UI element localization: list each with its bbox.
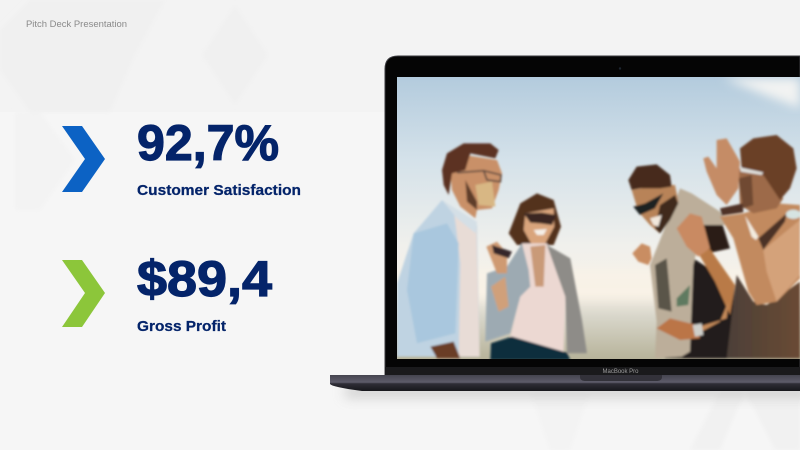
- webcam: [619, 67, 621, 70]
- laptop shadow: [345, 386, 800, 398]
- metric: customer satisfaction value: 92,7%: [137, 115, 279, 171]
- header label: Pitch Deck Presentation: [26, 19, 127, 30]
- metric label: customer satisfaction: Customer Satisfaction: [137, 182, 301, 199]
- laptop mockup: [330, 56, 800, 398]
- photo: four friends laughing: [397, 77, 800, 360]
- bottom bezel hinge: [385, 367, 800, 376]
- icon: blue chevron: [62, 126, 105, 192]
- person: woman with sunglasses: [485, 193, 587, 360]
- laptop base: [330, 375, 800, 391]
- laptop lid: [385, 56, 800, 375]
- icon: green chevron: [62, 260, 105, 327]
- person: man with scarf: [628, 164, 735, 358]
- person: man with raised hand: [677, 135, 800, 358]
- person: man with glasses: [397, 143, 502, 358]
- laptop model label: MacBook Pro: [602, 369, 639, 375]
- laptop thumb notch: [580, 375, 662, 381]
- metric label: gross profit: Gross Profit: [137, 318, 226, 335]
- metric: gross profit value: $89,4: [137, 251, 272, 307]
